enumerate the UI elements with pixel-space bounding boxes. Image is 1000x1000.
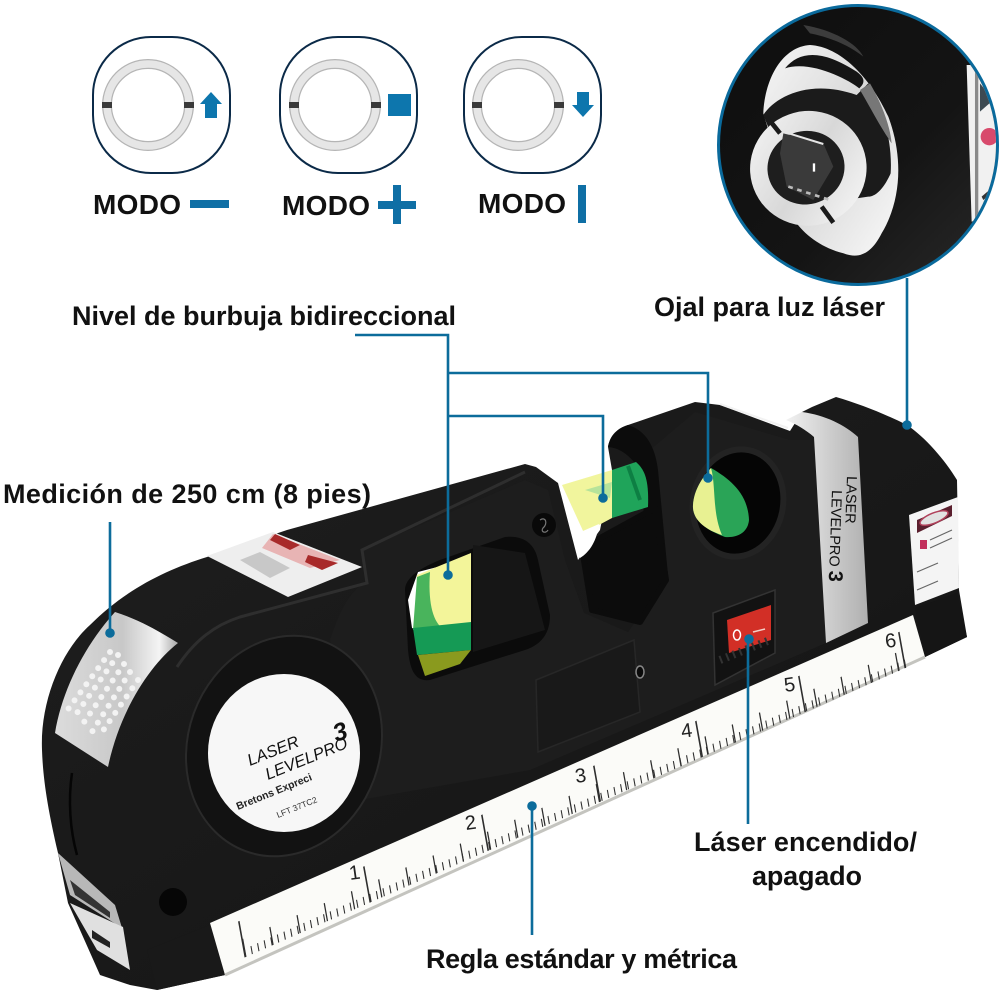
label: laser encendido <box>694 827 917 891</box>
leader: nivel <box>355 335 712 578</box>
callouts: leader lines <box>106 278 910 935</box>
dial ring <box>155 608 413 884</box>
label: modo horizontal <box>93 189 229 220</box>
top sticker <box>207 532 362 597</box>
inset: laser aperture close-up <box>718 6 1000 284</box>
tape end clip <box>58 853 130 970</box>
silver band <box>786 412 868 643</box>
ruler: 1 <box>348 862 362 885</box>
dial label <box>208 674 360 832</box>
device body <box>42 397 967 990</box>
dial label: LFT 37TC2 <box>275 794 319 820</box>
vial: left <box>413 553 471 676</box>
vial: right <box>693 468 749 537</box>
label: regla: Regla estándar y métrica <box>426 944 738 974</box>
right block rim <box>608 425 668 585</box>
dial label: 3 <box>329 717 351 748</box>
dial label: LASER <box>245 733 302 770</box>
crease line <box>177 472 525 667</box>
label: modo cross: MODO <box>282 190 370 221</box>
label: laser encendido: apagado <box>752 861 862 891</box>
leader: ojal <box>904 278 910 428</box>
laser level device <box>42 397 967 990</box>
label: medicion: Medición de 250 cm (8 pies) <box>3 479 371 509</box>
leader: regla <box>528 802 536 935</box>
label: ojal para luz laser: Ojal para luz láser <box>654 292 885 322</box>
bottom left base <box>147 925 225 990</box>
leader: medicion <box>106 522 114 636</box>
door panel <box>536 640 644 752</box>
ruler: 3 <box>574 765 588 788</box>
handle front face <box>330 412 826 800</box>
screw <box>532 513 556 537</box>
body hole <box>159 888 187 916</box>
label: nivel de burbuja: Nivel de burbuja bidireccional <box>72 301 456 331</box>
left window <box>405 537 550 680</box>
label: modo cross <box>282 185 416 224</box>
right base <box>915 593 967 657</box>
dial label: Bretons Expreci <box>235 771 314 813</box>
dial label: LEVELPRO <box>263 734 350 784</box>
white gap <box>576 524 599 558</box>
ruler: 5 <box>783 674 797 697</box>
silver band: LASER <box>841 476 859 524</box>
right hole <box>683 441 793 565</box>
label: laser encendido: Láser encendido/ <box>694 827 917 857</box>
mode card: cross square <box>280 37 417 173</box>
mode card: line up <box>93 37 230 173</box>
ruler: 4 <box>680 720 694 743</box>
tape side seam <box>70 773 77 855</box>
label: modo horizontal: MODO <box>93 189 181 220</box>
label: modo vertical <box>478 185 586 223</box>
mode card: line down <box>464 37 601 173</box>
power switch <box>713 590 775 685</box>
ruler: 2 <box>464 812 478 835</box>
panel: mode modes row <box>93 37 601 224</box>
ruler: 6 <box>884 630 898 653</box>
label: modo vertical: MODO <box>478 188 566 219</box>
power cap highlight <box>720 404 788 428</box>
silver band: LEVELPRO 3 <box>824 490 849 582</box>
ruler <box>210 615 925 975</box>
silver clip: measurement lock <box>55 612 178 767</box>
notch shadow <box>582 508 666 622</box>
end sticker <box>909 497 959 605</box>
leader: laser switch <box>746 636 752 824</box>
vial: center <box>562 462 648 533</box>
